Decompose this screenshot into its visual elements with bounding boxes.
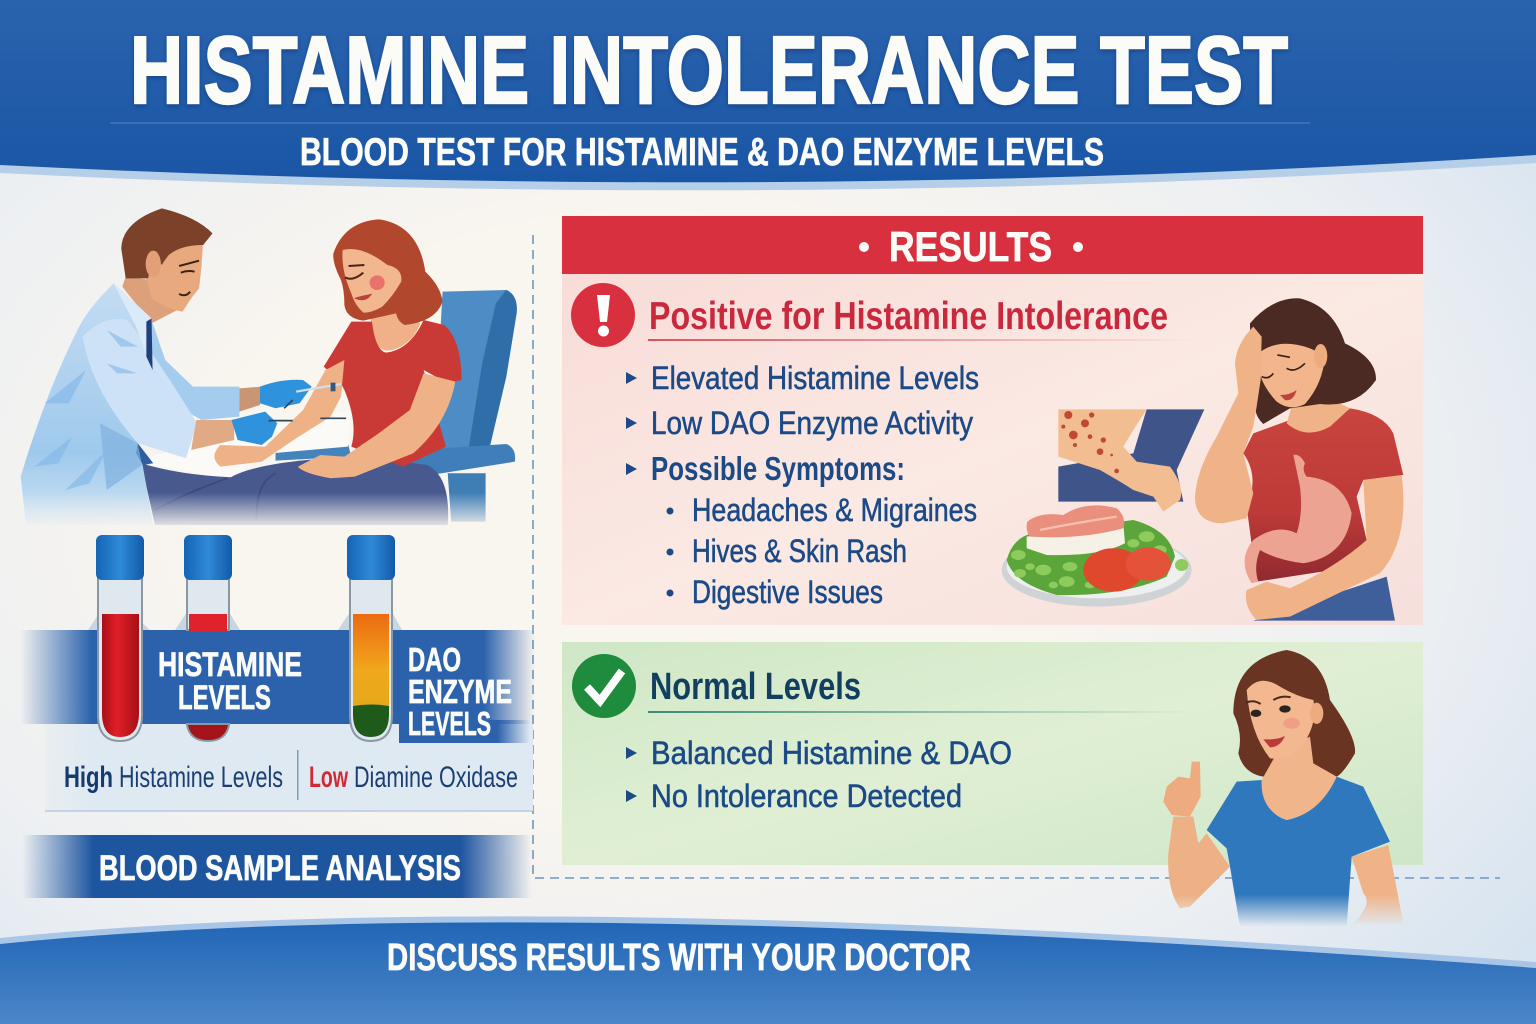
histamine levels label: LEVELS	[178, 679, 271, 717]
doctor	[21, 208, 312, 525]
syringe	[269, 383, 346, 421]
blood sample analysis banner	[22, 835, 532, 898]
normal findings list: Balanced Histamine & DAO	[651, 735, 1012, 771]
positive findings list: Possible Symptoms:	[651, 450, 905, 487]
dashed divider	[533, 235, 1500, 878]
test tube: histamine 1	[96, 535, 144, 741]
positive findings list: Elevated Histamine Levels	[651, 360, 979, 396]
DAO enzyme levels label	[408, 641, 512, 742]
footer banner	[0, 916, 1536, 1024]
positive findings list: Low DAO Enzyme Activity	[651, 405, 973, 441]
panel: normal result	[562, 642, 1423, 865]
panel: results header: RESULTS	[889, 223, 1052, 270]
positive heading: Positive for Histamine Intolerance	[649, 295, 1168, 338]
test tube: DAO	[347, 535, 395, 741]
positive findings list: Hives & Skin Rash	[692, 533, 907, 569]
icon: check mark	[572, 654, 636, 718]
panel: histamine and DAO tube labels	[20, 535, 535, 811]
normal heading: Normal Levels	[650, 666, 861, 708]
positive findings list	[626, 360, 979, 610]
trousers	[141, 457, 448, 525]
patient	[214, 219, 461, 478]
histamine levels label: HISTAMINE	[158, 646, 302, 684]
low DAO label: Low	[309, 761, 348, 794]
test tube: histamine 2	[184, 535, 232, 741]
woman with headache	[1195, 298, 1403, 621]
blue chair	[276, 290, 517, 522]
icon: food plate	[1002, 505, 1192, 607]
icon: stomach	[1245, 455, 1352, 583]
high histamine label: Histamine Levels	[119, 761, 283, 794]
DAO enzyme levels label: DAO	[408, 641, 461, 678]
paper sheet	[152, 410, 351, 478]
high histamine label: High	[64, 761, 113, 794]
panel: positive result	[562, 274, 1423, 625]
positive findings list: Headaches & Migraines	[692, 492, 977, 528]
subtitle: BLOOD TEST FOR HISTAMINE & DAO ENZYME LEVELS	[300, 131, 1104, 174]
low DAO label: Diamine Oxidase	[354, 761, 518, 794]
illustration: symptoms	[1002, 298, 1403, 621]
blood sample analysis banner: BLOOD SAMPLE ANALYSIS	[99, 849, 461, 888]
normal findings list: No Intolerance Detected	[651, 778, 962, 814]
results strip	[45, 724, 533, 811]
illustration: happy woman with thumbs up	[1163, 650, 1403, 927]
header banner	[0, 0, 1536, 190]
DAO enzyme levels label: LEVELS	[408, 705, 491, 742]
histamine levels label	[158, 646, 302, 717]
blue label band	[20, 612, 535, 743]
icon: exclamation	[571, 283, 635, 347]
icon: skin rash inset	[1058, 409, 1204, 512]
illustration: doctor drawing blood from patient	[21, 208, 517, 525]
panel: results header	[562, 216, 1423, 274]
positive findings list: Digestive Issues	[692, 574, 883, 610]
DAO enzyme levels label: ENZYME	[408, 673, 512, 710]
normal findings list	[626, 735, 1012, 814]
footer call to action: DISCUSS RESULTS WITH YOUR DOCTOR	[387, 937, 971, 979]
